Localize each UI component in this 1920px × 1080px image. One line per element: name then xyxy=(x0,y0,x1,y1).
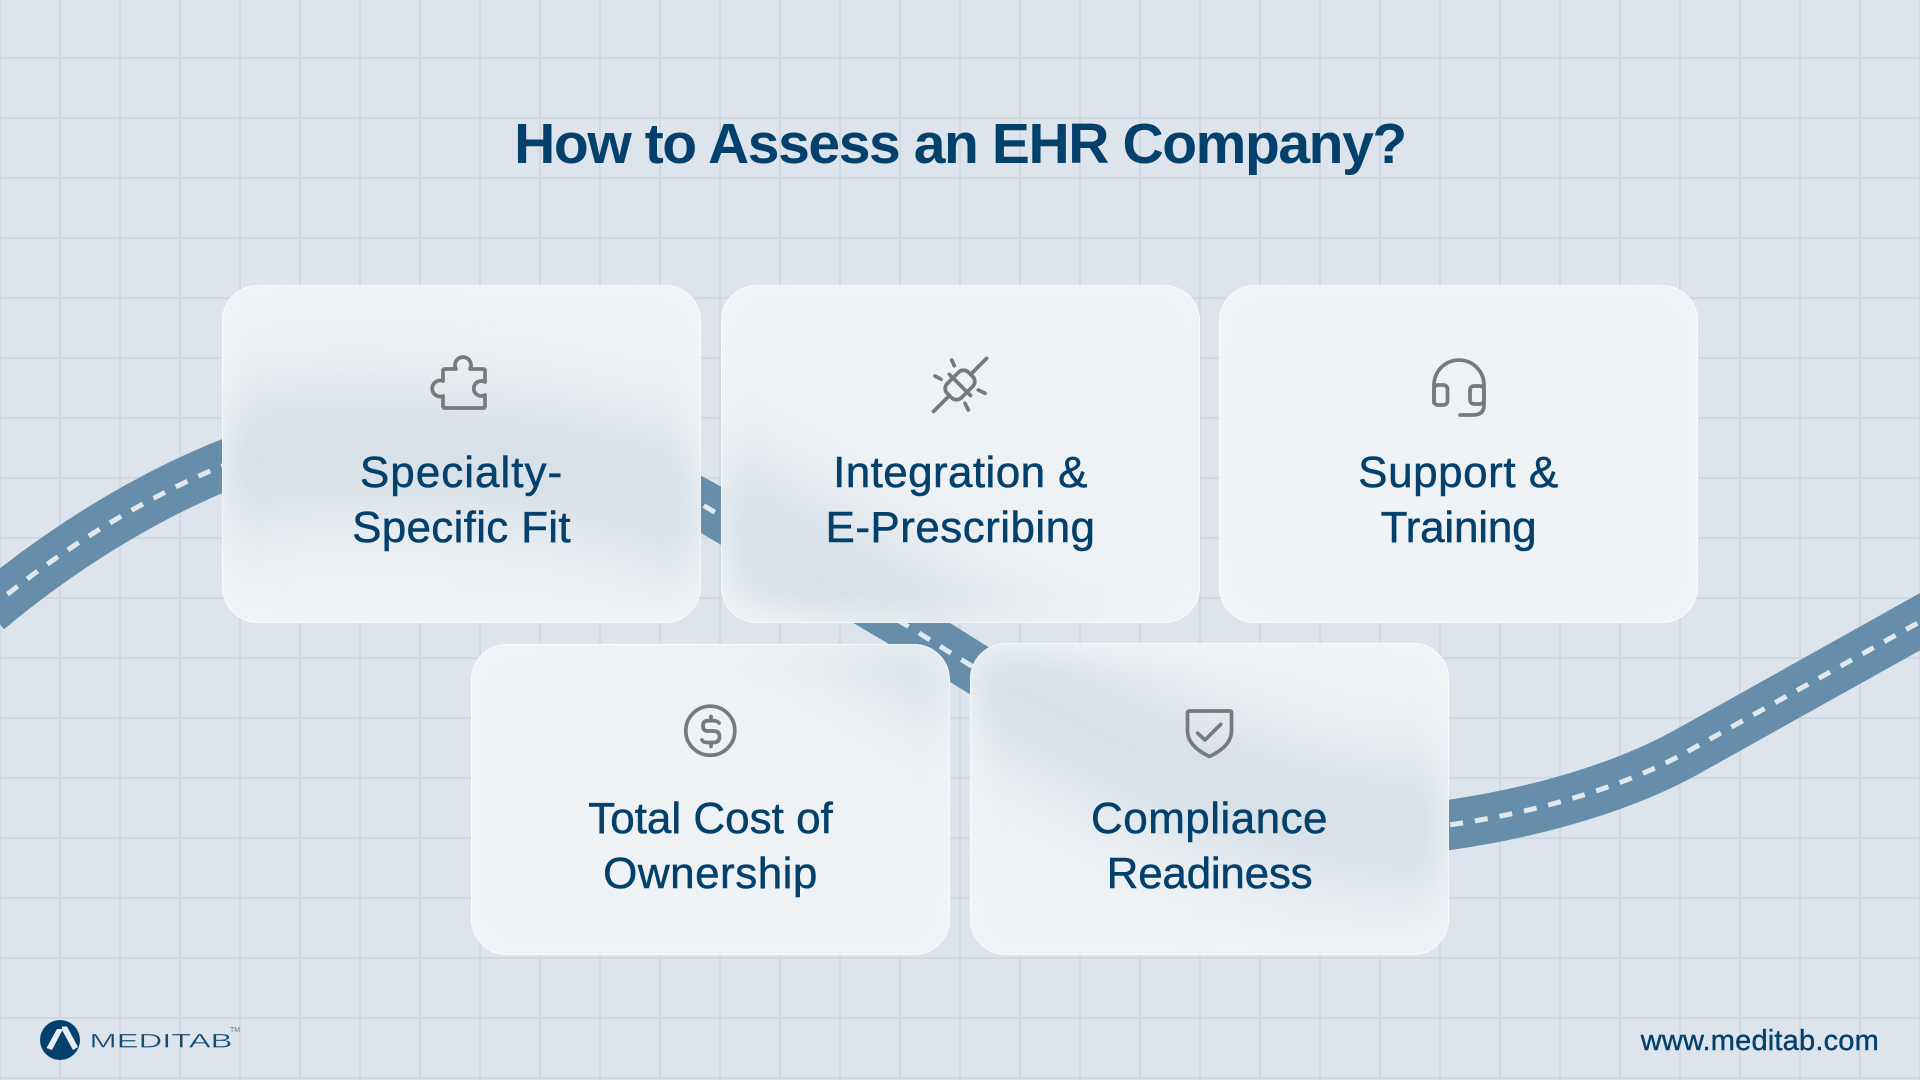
card label xyxy=(1091,794,1328,898)
frosted glass fill of the five cards with the blurred road showing through xyxy=(222,285,1698,955)
logo: Meditab: MEDITAB xyxy=(90,1030,232,1052)
card label xyxy=(1358,448,1559,552)
card label: Total Cost of xyxy=(588,794,833,843)
card label: E-Prescribing xyxy=(826,503,1095,552)
website url: www.meditab.com xyxy=(1641,1025,1879,1057)
panel: Compliance Readiness xyxy=(970,643,1449,955)
icon: dollar coin xyxy=(686,706,735,755)
card label: Specific Fit xyxy=(352,503,571,552)
panel: Specialty-Specific Fit xyxy=(222,285,701,623)
card label: Training xyxy=(1381,503,1536,552)
icon: headset xyxy=(1434,360,1484,415)
title: How to Assess an EHR Company? xyxy=(514,112,1406,176)
card label xyxy=(588,794,834,898)
panel: Total Cost of Ownership xyxy=(471,644,950,955)
card label: Support & xyxy=(1358,448,1559,497)
icon: shield with check xyxy=(1188,711,1232,756)
card label: Ownership xyxy=(603,849,818,898)
card label: Compliance xyxy=(1091,794,1328,843)
card label xyxy=(352,448,571,552)
logo: Meditab: TM xyxy=(230,1027,240,1034)
icon: puzzle piece xyxy=(432,357,485,408)
card label: Integration & xyxy=(833,448,1088,497)
logo: Meditab xyxy=(40,1020,240,1060)
card label xyxy=(826,448,1095,552)
card label: Readiness xyxy=(1107,849,1312,898)
card label: Specialty- xyxy=(360,448,563,497)
icon: unplugged connector xyxy=(923,348,997,422)
panel: Integration & E-Prescribing xyxy=(721,285,1200,623)
panel: Support & Training xyxy=(1219,285,1698,623)
